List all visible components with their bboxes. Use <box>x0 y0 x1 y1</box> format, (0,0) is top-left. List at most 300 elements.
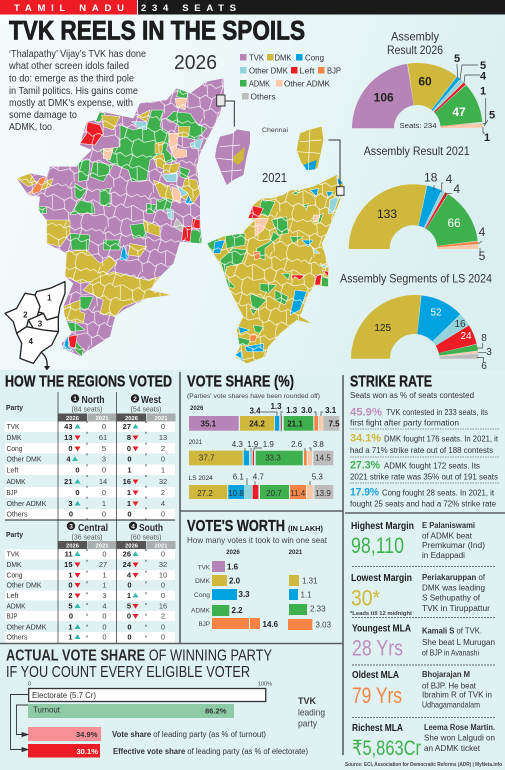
bars 2026: 2.0 <box>229 576 241 586</box>
bar: vote share of leading party <box>28 727 266 741</box>
region data: Central: 0 <box>102 550 107 558</box>
region data: West: 0 <box>161 422 165 431</box>
intro text: in Tamil politics. His gains come <box>9 86 138 97</box>
party names: Others <box>6 510 28 518</box>
bar: electorate: Electorate (5.7 Cr) <box>32 691 96 700</box>
region data: South: 0 <box>127 580 132 590</box>
chart: Assembly Result 2021 <box>364 144 486 263</box>
record: lowest margin: TVK in Tiruppattur <box>422 603 490 613</box>
region headers: South <box>139 523 163 534</box>
region data: West: 27 <box>123 422 131 431</box>
record: oldest MLA <box>352 669 496 718</box>
party names: ADMK <box>6 477 26 486</box>
region data: West: 0 <box>161 454 165 464</box>
stacked bar LS 2024: 27.2 <box>197 489 213 498</box>
strike rate entries: Cong fought 28 seats. In 2021, it <box>382 488 495 498</box>
party names <box>6 422 47 642</box>
label: TVK leading party: leading <box>298 708 325 718</box>
bar: electorate <box>29 688 266 702</box>
region data: South: 2 <box>161 612 165 620</box>
bars 2026: 3.3 <box>238 590 250 599</box>
bars 2026: 14.6 <box>262 620 279 629</box>
record: richest MLA: an ADMK ticket <box>424 743 481 753</box>
region data: West: 32 <box>159 477 167 486</box>
party names: Cong <box>6 570 22 580</box>
heading suffix: in lakh: (IN LAKH) <box>288 526 323 533</box>
region data: North: 1 <box>102 499 106 508</box>
region headers: (36 seats) <box>72 534 102 542</box>
region headers: Party <box>6 403 24 412</box>
chart: Assembly Result 2026: 60 <box>418 74 432 88</box>
bar: effective vote share of leading party: 30.1% <box>76 747 98 756</box>
heading: actual vote share <box>6 648 272 681</box>
chart: Assembly Segments of LS 2024: 16 <box>454 319 466 330</box>
party names: Others <box>6 632 28 642</box>
label: TVK leading party <box>298 696 325 728</box>
chart: Assembly Segments of LS 2024: 24 <box>460 331 472 342</box>
stacked bar 2026 <box>189 402 340 431</box>
record: highest margin: E Palaniswami <box>422 520 475 530</box>
region headers: West <box>141 395 162 406</box>
party names: Other DMK <box>6 580 42 590</box>
bars 2026 <box>191 549 279 629</box>
chart: Assembly Result 2026: 106 <box>374 90 394 104</box>
record: richest MLA: ₹5,863Cr <box>352 737 421 760</box>
region data: South: 0 <box>161 632 165 642</box>
bars 2021: 3.03 <box>316 620 332 630</box>
region data: South: 5 <box>127 602 131 610</box>
region data: Central <box>64 550 107 642</box>
record: lowest margin: S Sethupathy of <box>422 592 481 602</box>
chart: Assembly Segments of LS 2024: 8 <box>481 333 487 344</box>
strike rate entries: 27.3% <box>350 460 380 472</box>
intro text: to do: emerge as the third pole <box>9 74 134 84</box>
locator map of regions <box>5 282 65 369</box>
title: TVK REELS IN THE SPOILS <box>9 16 305 46</box>
region data: North <box>64 422 107 518</box>
chart: Assembly Result 2021: 133 <box>377 207 397 221</box>
region data: North: 0 <box>102 488 106 497</box>
region headers: 4 <box>131 524 135 530</box>
region data: Central: 0 <box>102 632 107 642</box>
legend: Left <box>300 66 315 76</box>
bar: turnout: 86.2% <box>205 706 227 716</box>
panel: vote's worth <box>187 518 332 630</box>
party names: Other ADMK <box>6 622 47 632</box>
record: youngest MLA: Youngest MLA <box>352 624 411 634</box>
record: richest MLA <box>352 722 495 760</box>
region data: Central: 2 <box>68 591 72 600</box>
stacked bar 2021: 37.7 <box>199 454 215 462</box>
label: TVK leading party: TVK <box>298 696 317 706</box>
party names: BJP <box>6 612 18 620</box>
bars 2021: 2.33 <box>310 604 326 614</box>
region headers: Party <box>6 530 24 539</box>
region data: North: 61 <box>99 433 107 442</box>
region data: South: 16 <box>159 602 167 610</box>
chart: Assembly Segments of LS 2024 <box>340 272 492 372</box>
region data: North: 14 <box>99 477 107 486</box>
strike rate entries: 34.1% <box>350 432 381 444</box>
panel dividers <box>0 372 505 755</box>
stacked bar 2021: 2.6 <box>291 440 303 449</box>
record: oldest MLA: Ibrahim R of TVK in <box>422 690 492 700</box>
region headers: North <box>82 395 104 406</box>
region data: West: 0 <box>127 454 132 464</box>
stacked bar 2026: 3.4 <box>249 406 261 415</box>
region data: Central: 1 <box>68 632 72 642</box>
record: lowest margin: Periakaruppan of <box>422 572 486 582</box>
party names: DMK <box>6 560 22 569</box>
subheading: How many votes it took to win one seat <box>187 536 328 545</box>
chart: Assembly Result 2021: Assembly Result 2021 <box>364 144 470 158</box>
region data: Central: 4 <box>102 602 107 610</box>
bar: effective vote share of leading party <box>28 744 308 758</box>
region data: North: 0 <box>75 466 80 474</box>
region headers: 2 <box>133 396 137 403</box>
region data: West: 0 <box>161 510 165 518</box>
panel: records <box>350 520 496 760</box>
party names: Other ADMK <box>6 499 47 508</box>
region headers: 2026 <box>66 416 80 422</box>
region data: South: 10 <box>159 570 167 580</box>
region data: West: 13 <box>159 433 167 442</box>
stacked bar 2021: 2021 <box>189 440 203 446</box>
record: youngest MLA <box>352 624 496 665</box>
chart: Assembly Result 2026 <box>373 30 495 144</box>
record: oldest MLA: 79 Yrs <box>352 683 402 708</box>
axis labels: 0 <box>28 682 31 688</box>
stacked bar LS 2024: 4.7 <box>253 472 264 482</box>
bar: effective vote share of leading party: Effective vote share of leading party (as % of electorate) <box>113 747 308 756</box>
region data: South: 0 <box>127 622 132 632</box>
header strip: 234 SEATS <box>141 3 236 14</box>
chart: Assembly Result 2021: 18 <box>424 170 438 184</box>
record: oldest MLA: Udhagamandalam <box>422 700 480 710</box>
legend: Other ADMK <box>284 78 330 88</box>
region data: West: 0 <box>127 510 132 518</box>
bar: turnout: Turnout <box>33 706 61 714</box>
record: lowest margin: DMK was leading <box>422 582 485 592</box>
record: richest MLA: Leema Rose Martin. <box>424 722 495 732</box>
region data: West <box>123 422 167 518</box>
party names: Cong <box>6 444 22 453</box>
region data: North: 0 <box>102 422 106 431</box>
region data: North: 0 <box>68 444 72 453</box>
chart: Assembly Result 2026: Seats: 234 <box>400 121 436 130</box>
bars 2026: DMK <box>195 578 211 585</box>
bars 2026: Cong <box>194 592 211 599</box>
region data: Central: 1 <box>68 570 72 580</box>
strike rate entries: TVK contested in 233 seats, its <box>386 408 488 417</box>
bars 2026: ADMK <box>191 608 211 614</box>
map: 2021 result <box>203 173 347 367</box>
bars 2026: 1.6 <box>227 562 239 572</box>
chart: Assembly Result 2026: 5 <box>454 53 460 65</box>
region data: South: 0 <box>161 580 165 590</box>
record: highest margin: of ADMK beat <box>422 530 473 540</box>
stacked bar 2026: 21.1 <box>287 420 303 429</box>
legend: BJP <box>327 66 341 76</box>
region headers: 2026 <box>125 544 139 550</box>
bars 2026: TVK <box>198 564 211 572</box>
region headers: (60 seats) <box>130 534 162 542</box>
panel: vote share <box>187 374 340 499</box>
stacked bar LS 2024: 13.9 <box>315 489 331 498</box>
region data: North: 43 <box>64 422 72 431</box>
map label: Chennai: Chennai <box>262 127 288 134</box>
bars 2026: BJP <box>198 621 210 628</box>
record: youngest MLA: 28 Yrs <box>352 636 403 660</box>
stacked bar LS 2024: 20.7 <box>266 489 282 498</box>
label: TVK leading party: party <box>298 718 317 728</box>
chart: Assembly Result 2021: 4 <box>479 225 486 239</box>
chart: Assembly Result 2026: 47 <box>452 105 466 119</box>
bars 2026: 2026 <box>226 549 240 556</box>
region data: North: 5 <box>102 444 106 453</box>
region headers: 2026 <box>66 544 80 550</box>
record: oldest MLA: of BJP. He beat <box>422 680 477 690</box>
chart: Assembly Result 2026: 5 <box>489 110 495 122</box>
record: richest MLA: Richest MLA <box>352 723 403 734</box>
panel: how the regions voted <box>5 374 176 643</box>
locator map of regions: 4 <box>28 337 33 346</box>
heading: strike rate: STRIKE RATE <box>350 374 432 390</box>
region data: South: 26 <box>123 550 131 558</box>
record: lowest margin <box>350 572 496 618</box>
region data: Central: 11 <box>65 550 72 558</box>
intro text: ADMK, too <box>9 122 52 133</box>
region headers: Central <box>78 523 108 534</box>
region data: Central: 15 <box>64 560 72 569</box>
bar: turnout <box>28 704 234 718</box>
region headers: 2021 <box>155 544 168 550</box>
chart: Assembly Result 2021: 4 <box>453 182 460 196</box>
note: rounding: (Parties' vote shares have been rounded off) <box>187 393 320 400</box>
party names: ADMK <box>6 602 26 610</box>
chart: Assembly Segments of LS 2024: 125 <box>374 323 391 334</box>
region data: West: 4 <box>161 499 165 508</box>
axis labels: 100% <box>258 682 272 688</box>
region data: Central: 0 <box>69 612 73 620</box>
intro text: what other screen idols failed <box>8 61 129 72</box>
region headers: (54 seats) <box>130 406 162 414</box>
chart: Assembly Result 2026: Result 2026 <box>387 43 443 57</box>
axis labels <box>28 682 272 688</box>
record: oldest MLA: Bhojarajan M <box>422 669 470 679</box>
region data: West: 2 <box>161 488 165 497</box>
panel: strike rate <box>350 374 500 508</box>
strike rate entries: 2021 strike rate was 35% out of 191 seats <box>350 472 498 482</box>
intro text: mostly at DMK's expense, with <box>9 98 133 109</box>
legend <box>240 52 341 102</box>
region data: West: 1 <box>127 499 131 508</box>
bars 2021: 2021 <box>289 549 303 556</box>
stacked bar 2026: 1.3 <box>286 406 298 415</box>
header strip <box>0 0 505 14</box>
legend: Other DMK <box>249 66 288 76</box>
region data: North: 0 <box>102 510 106 518</box>
strike rate entries <box>350 406 500 508</box>
inset: Chennai 2026 <box>215 95 250 185</box>
intro text: ‘Thalapathy’ Vijay’s TVK has done <box>9 49 146 60</box>
region data: North: 4 <box>66 454 71 464</box>
strike rate entries: 17.9% <box>350 486 379 498</box>
stacked bar 2026: 3.0 <box>301 406 313 415</box>
strike rate entries: first fight after party formation <box>350 418 459 428</box>
region data: North: 21 <box>64 477 72 486</box>
chart: Assembly Result 2026: Assembly <box>391 30 439 44</box>
party names: BJP <box>6 488 18 497</box>
party names: Other DMK <box>6 454 42 464</box>
subheading: Seats won as % of seats contested <box>350 391 474 400</box>
stacked bar 2026: 7.5 <box>328 420 340 429</box>
region data: Central: 0 <box>68 580 72 590</box>
chart: Assembly Result 2021: 5 <box>479 249 486 263</box>
map: 2026 result <box>13 73 227 360</box>
region data: South: 4 <box>127 570 132 580</box>
region data: North: 0 <box>69 510 73 518</box>
party names: DMK <box>6 433 22 442</box>
heading: actual vote share: IF YOU COUNT EVERY ELIGIBLE VOTER <box>6 664 250 681</box>
bar: vote share of leading party: 34.9% <box>76 730 98 739</box>
record: youngest MLA: Kamali S of TVK. <box>422 626 482 636</box>
stacked bar 2026: 3.1 <box>325 406 337 415</box>
legend: ADMK <box>249 78 270 88</box>
record: lowest margin: 30* <box>351 586 380 610</box>
stacked bar 2021: 1.9 <box>247 440 259 449</box>
region data: Central: 1 <box>102 580 107 590</box>
party names: TVK <box>6 422 20 431</box>
chart: Assembly Result 2026: 5 <box>480 60 486 72</box>
region data: South: 0 <box>161 591 165 600</box>
region data: South: 32 <box>159 560 167 569</box>
region headers: 2021 <box>96 416 109 422</box>
region data: Central: 5 <box>68 602 72 610</box>
stacked bar LS 2024: 6.1 <box>233 472 244 482</box>
strike rate entries: 45.9% <box>350 406 382 418</box>
bars 2021: 1.31 <box>302 576 318 586</box>
region data: West: 1 <box>127 466 132 474</box>
region data: Central: 3 <box>102 591 107 600</box>
intro text <box>8 49 146 133</box>
legend: Cong <box>305 52 324 62</box>
chart: Assembly Segments of LS 2024: 6 <box>481 361 487 372</box>
region data: West: 8 <box>127 433 131 442</box>
region data: North: 13 <box>64 433 72 442</box>
chart: Assembly Result 2021: 4 <box>446 172 453 186</box>
bars 2021: 1.1 <box>300 590 312 600</box>
region data: Central: 1 <box>102 570 107 580</box>
region data: Central: 1 <box>68 622 72 632</box>
stacked bar 2021: 4.3 <box>232 440 243 449</box>
region headers: 2021 <box>155 416 168 422</box>
stacked bar LS 2024: LS 2024 <box>189 476 213 482</box>
chart: Assembly Result 2026: 1 <box>484 132 490 144</box>
record: youngest MLA: She beat L Murugan <box>422 637 495 647</box>
heading: vote's worth: VOTE'S WORTH <box>187 518 285 535</box>
stacked bar 2021: 1.9 <box>263 440 274 449</box>
stacked bar LS 2024: 5.3 <box>312 472 323 482</box>
arrows: connectors <box>10 694 28 752</box>
record: richest MLA: She won Lalgudi on <box>424 732 495 742</box>
bar: vote share of leading party: Vote share of leading party (as % of turnout) <box>112 730 266 739</box>
region data: South: 24 <box>123 560 132 569</box>
stacked bar 2021: 33.3 <box>265 454 281 462</box>
stacked bar 2026: 2026 <box>190 406 204 412</box>
region data: West: 0 <box>127 444 131 453</box>
region data: South <box>123 550 167 642</box>
region data: West: 1 <box>127 488 131 497</box>
stacked bar LS 2024 <box>189 472 333 499</box>
stacked bar 2026: 1.3 <box>270 402 282 411</box>
table backgrounds <box>5 422 175 642</box>
region data: North: 0 <box>102 466 106 474</box>
stacked bar 2021: 14.5 <box>315 454 331 462</box>
stacked bar 2021: 3.8 <box>313 440 324 449</box>
region data: West: 16 <box>123 477 131 486</box>
heading: actual vote share: ACTUAL VOTE SHARE OF WINNING PARTY <box>6 648 272 664</box>
region headers: 2021 <box>96 544 109 550</box>
record: lowest margin: *Leads till 12 midnight <box>350 611 412 617</box>
region data: North: 3 <box>68 499 72 508</box>
region data: South: 0 <box>161 550 165 558</box>
chart: Assembly Segments of LS 2024: 3 <box>486 347 492 358</box>
stacked bar 2026: 24.2 <box>249 420 265 429</box>
stacked bar LS 2024: 11.4 <box>290 489 306 498</box>
strike rate entries: had a 71% strike rate out of 188 contests <box>350 446 493 455</box>
region data: West: 1 <box>161 466 165 474</box>
locator map of regions: 3 <box>38 320 43 329</box>
region headers: (84 seats) <box>72 406 102 414</box>
region data: North: 0 <box>75 488 80 497</box>
legend: DMK <box>274 52 292 62</box>
stacked bar LS 2024: 10.8 <box>228 489 244 498</box>
bars 2021 <box>288 549 332 630</box>
heading: vote share: VOTE SHARE (%) <box>187 374 294 390</box>
record: highest margin <box>351 520 496 567</box>
region headers: 2026 <box>125 416 139 422</box>
panel: actual vote share <box>6 648 325 758</box>
chart: Assembly Segments of LS 2024: 52 <box>430 308 442 318</box>
bars 2026: 2.2 <box>232 606 243 615</box>
region data: South: 0 <box>127 632 132 642</box>
region data: Central: 27 <box>99 560 107 569</box>
legend: TVK <box>249 52 264 62</box>
2026 map label: 2026 <box>174 52 217 74</box>
inset: Chennai 2021 <box>297 127 344 195</box>
region headers <box>6 394 168 550</box>
record: highest margin: 98,110 <box>351 533 404 558</box>
record: youngest MLA: of BJP in Avanashi <box>422 648 479 658</box>
stacked bar 2026: 35.1 <box>201 420 217 429</box>
strike rate entries: fought 25 seats and had a 72% strike rate <box>350 500 497 508</box>
record: highest margin: Premkumar (Ind) <box>422 540 485 550</box>
heading: how the regions voted: HOW THE REGIONS VOTED <box>5 374 172 390</box>
header strip: TAMIL NADU <box>14 3 124 14</box>
party names: TVK <box>6 550 20 558</box>
region headers: 1 <box>73 396 77 403</box>
2021 map label: 2021 <box>262 170 287 185</box>
region data: North: 3 <box>102 454 106 464</box>
locator map of regions: 1 <box>47 294 52 303</box>
record: highest margin: Highest Margin <box>351 521 414 532</box>
region data: Central: 0 <box>102 622 107 632</box>
region headers: 3 <box>69 524 73 530</box>
legend: Others <box>250 92 276 102</box>
region data: Central: 0 <box>102 612 107 620</box>
chart: Assembly Result 2026: 4 <box>480 70 487 82</box>
